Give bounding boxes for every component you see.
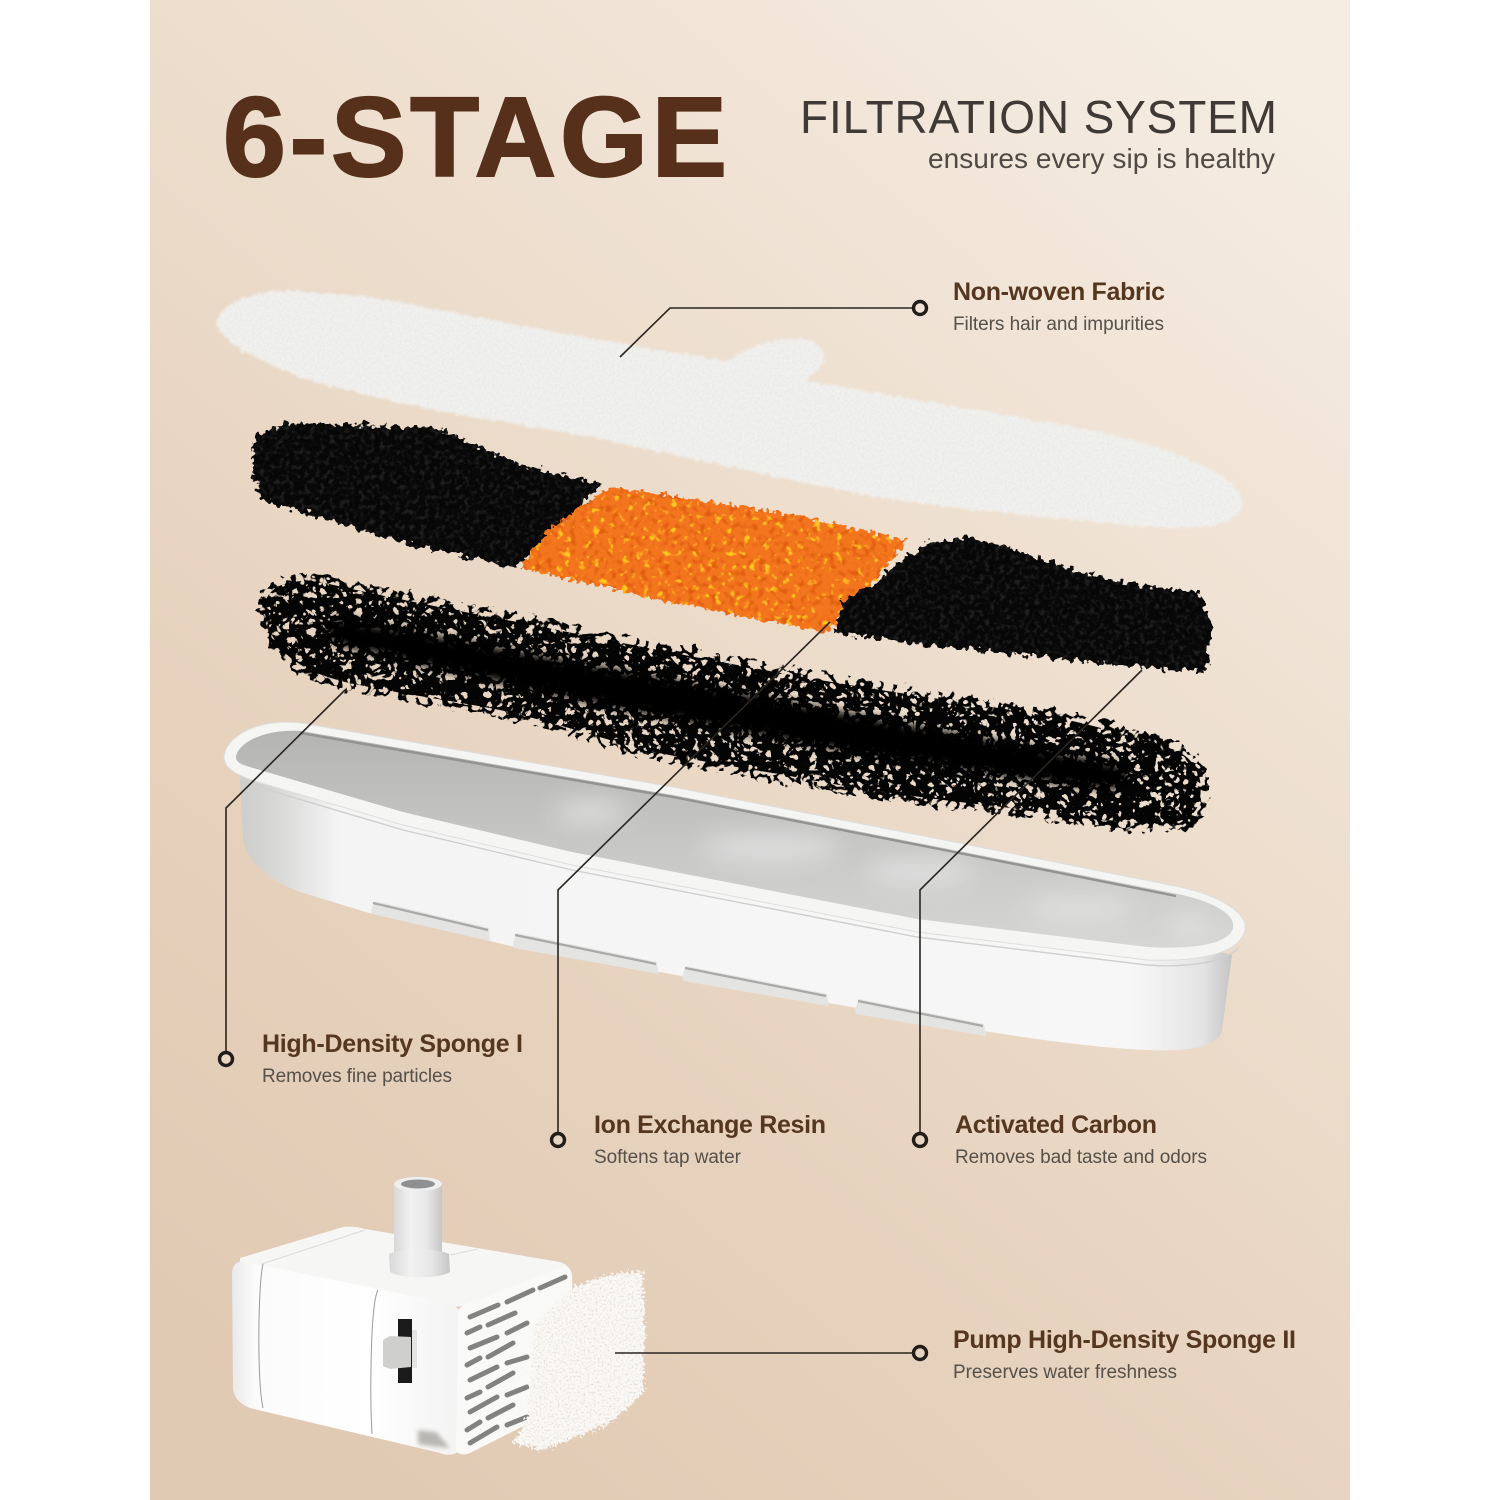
label: high-density sponge I: High-Density Sponge I <box>262 1030 523 1058</box>
heading: filtration system: ensures every sip is healthy <box>928 143 1275 174</box>
pump front face <box>232 1261 460 1455</box>
label: non-woven fabric: Filters hair and impurities <box>953 314 1164 335</box>
leader: activated carbon <box>914 670 1142 1146</box>
label: high-density sponge I: Removes fine particles <box>262 1066 452 1087</box>
label: non-woven fabric: Non-woven Fabric <box>953 278 1165 306</box>
label: pump high-density sponge II: Pump High-Density Sponge II <box>953 1326 1296 1354</box>
pump right face <box>456 1267 575 1454</box>
tray slots <box>371 901 986 1036</box>
pump outlet neck <box>394 1185 442 1252</box>
pump foam patch <box>418 1430 450 1448</box>
leader: high-density sponge I <box>220 690 345 1066</box>
label: ion exchange resin <box>594 1111 826 1168</box>
layer: filter tray <box>224 722 1245 1050</box>
leader: pump sponge II <box>615 1346 926 1360</box>
label: activated carbon: Activated Carbon <box>955 1111 1157 1139</box>
tray interior <box>236 731 1233 948</box>
label: pump high-density sponge II: Preserves water freshness <box>953 1362 1177 1383</box>
tray rim <box>224 722 1245 960</box>
tray interior highlights <box>555 800 1212 936</box>
layer: activated carbon, right <box>835 537 1212 672</box>
layer: non-woven fabric <box>216 291 1242 528</box>
background panel <box>150 0 1350 1500</box>
pump collar <box>389 1250 450 1277</box>
label: ion exchange resin: Ion Exchange Resin <box>594 1111 826 1139</box>
label: activated carbon: Removes bad taste and odors <box>955 1147 1207 1168</box>
pump foam sponge II <box>513 1270 645 1450</box>
heading: filtration system: FILTRATION SYSTEM <box>800 91 1277 143</box>
heading: filtration system <box>800 91 1277 174</box>
leader: ion exchange resin <box>552 622 830 1146</box>
title: 6-STAGE: 6-STAGE <box>223 74 727 200</box>
pump vent slots <box>467 1277 565 1443</box>
tray slot shadows <box>373 903 983 1026</box>
label: activated carbon <box>955 1111 1207 1168</box>
label: pump high-density sponge II <box>953 1326 1296 1383</box>
pump top face <box>240 1227 572 1307</box>
label: high-density sponge I <box>262 1030 523 1087</box>
tray body <box>240 778 1232 1050</box>
layer: activated carbon, left <box>252 423 600 567</box>
layer: ion exchange resin <box>520 487 908 632</box>
leader: non-woven fabric <box>620 302 926 357</box>
label: non-woven fabric <box>953 278 1165 335</box>
label: ion exchange resin: Softens tap water <box>594 1147 742 1168</box>
pump <box>232 1177 645 1455</box>
pump switch <box>383 1319 417 1383</box>
layer: high-density sponge I <box>258 573 1210 832</box>
